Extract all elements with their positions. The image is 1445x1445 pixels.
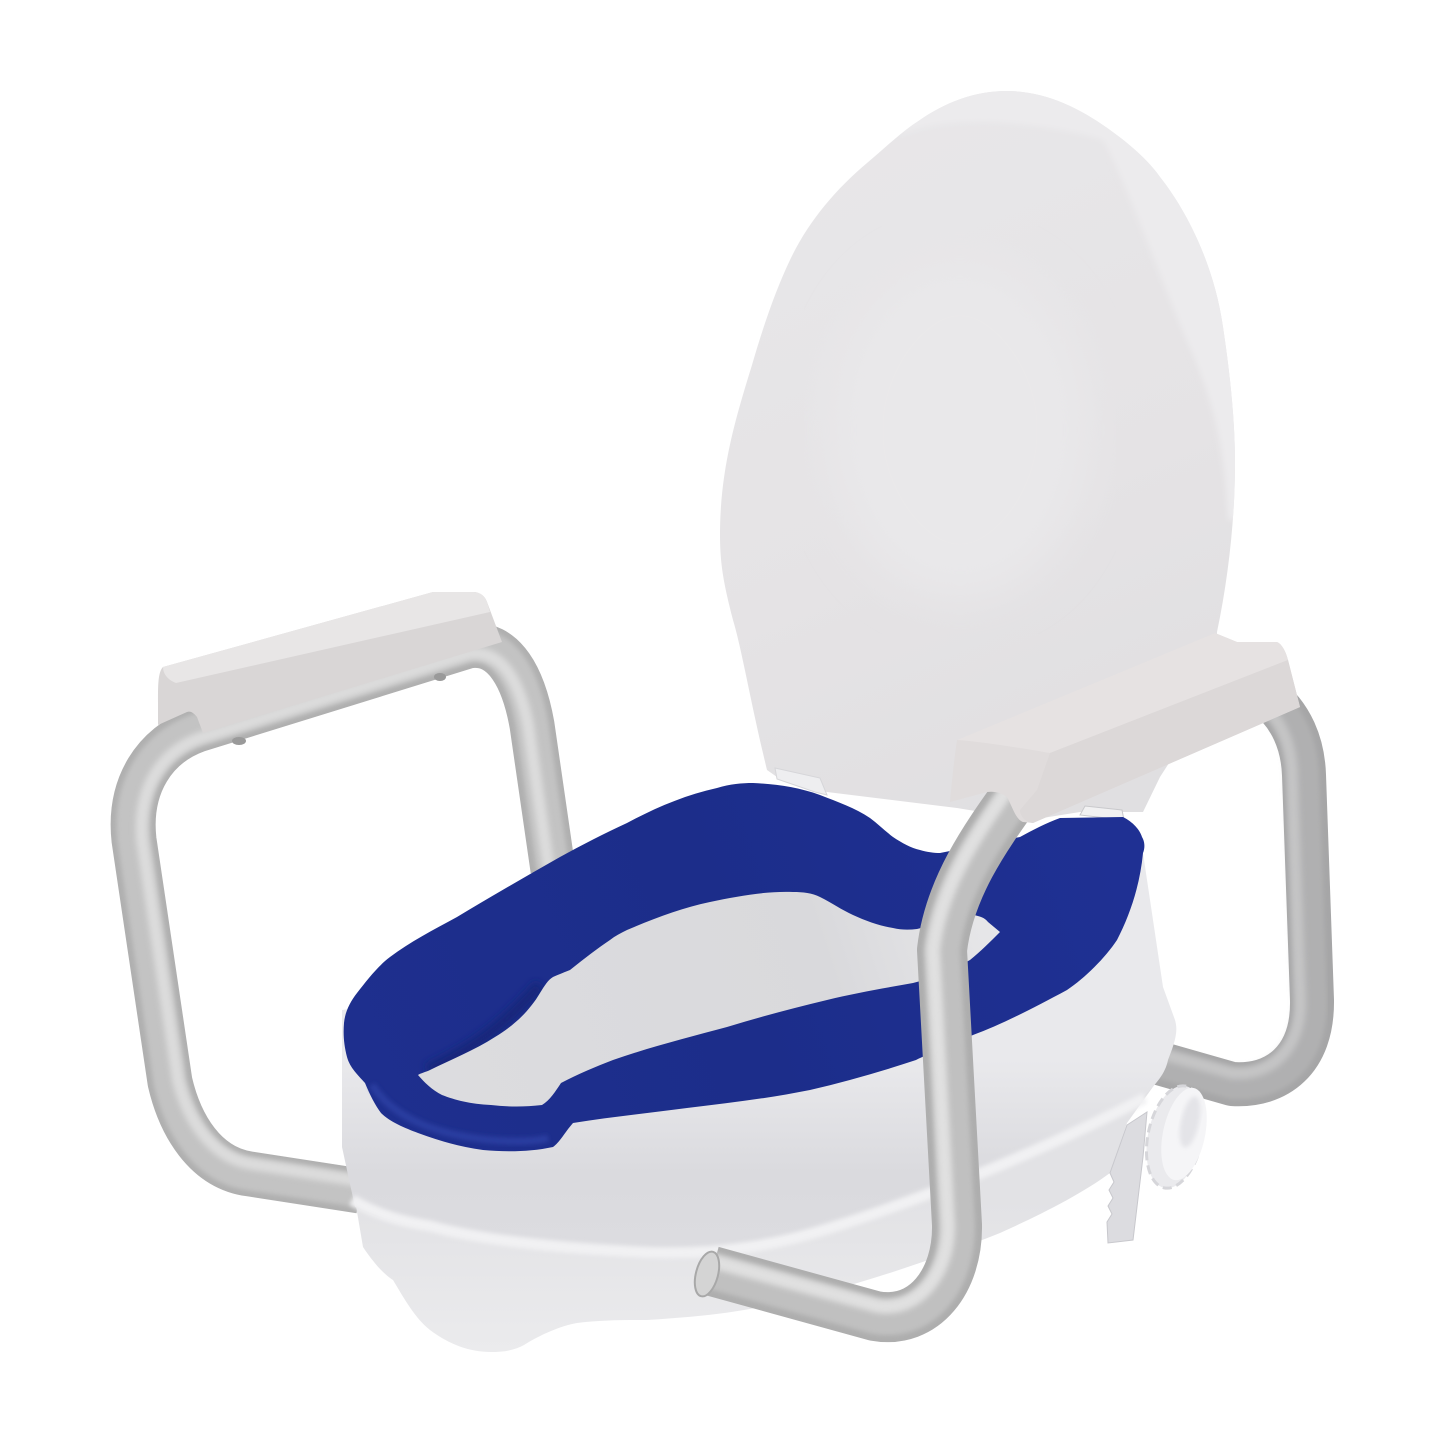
blue seat cushion: [344, 783, 1144, 1151]
lid hinge left: [775, 768, 827, 795]
toilet lid: [720, 60, 1245, 820]
seat clamp knob: [1138, 1081, 1214, 1193]
right armrest pad: [950, 633, 1300, 823]
left armrest tube frame: [133, 645, 553, 1191]
right armrest rear tube: [1155, 695, 1312, 1084]
right armrest front tube: [712, 772, 1030, 1317]
cushion rim shading: [372, 985, 548, 1141]
product photo: raised toilet seat with armrests: [110, 91, 1334, 1352]
seat base ridge highlight: [352, 1098, 1145, 1253]
seat base lower: [355, 1050, 1160, 1352]
right armrest tube end cap: [690, 1249, 724, 1299]
seat base upper: [342, 853, 1176, 1252]
left armrest screws: [232, 673, 446, 745]
seat opening: [418, 892, 1000, 1106]
seat clamp strap: [1107, 1112, 1147, 1243]
left armrest pad: [158, 592, 502, 733]
lid hinge right: [1080, 806, 1124, 820]
